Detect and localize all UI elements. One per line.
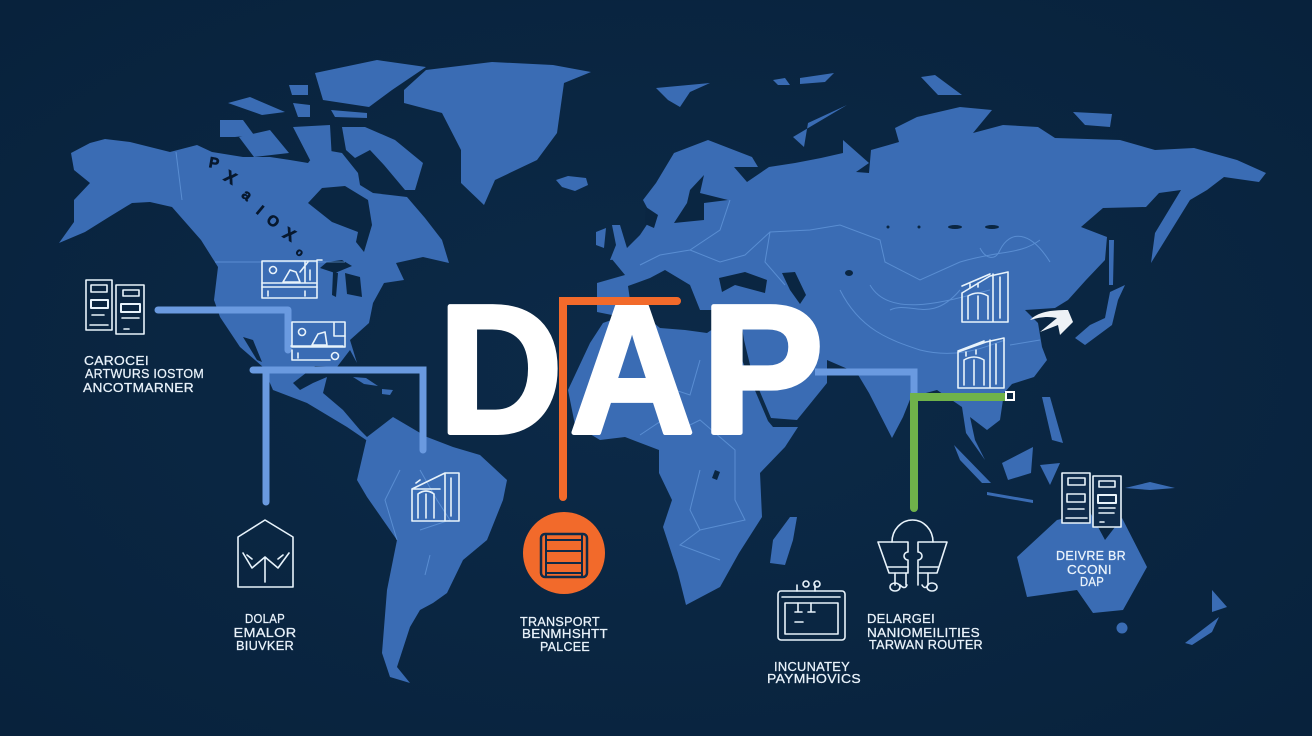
- text: Australia caption: DAP: [1080, 575, 1104, 589]
- marks: dark glyph trail across Canada: X: [280, 224, 299, 246]
- text: transport caption: BENMHSHTT: [522, 627, 608, 641]
- title: DAP: D: [438, 266, 562, 472]
- title: DAP: P: [702, 266, 824, 472]
- map: inland seas and lakes: [243, 175, 999, 480]
- text: west caption: ANCOTMARNER: [83, 381, 194, 395]
- text: west caption: CAROCEI: [84, 354, 149, 368]
- icon: orange circle with shutter: [523, 512, 605, 594]
- map: Japan: [1075, 240, 1125, 345]
- icon: bank, South America: [412, 473, 459, 521]
- text: house caption: DOLAP: [245, 612, 285, 626]
- map: British Isles: [596, 225, 630, 260]
- marks: dark glyph trail across Canada: O: [263, 211, 283, 232]
- map: Greenland: [404, 62, 591, 205]
- text: window caption: PAYMHOVICS: [767, 672, 861, 686]
- icon: document pair, Australia: [1062, 473, 1121, 527]
- route: orange line: [563, 301, 677, 497]
- text: house caption: [234, 612, 296, 653]
- text: Australia caption: [1056, 549, 1126, 589]
- route: blue frame over Central America: [253, 370, 423, 502]
- text: transport caption: [520, 615, 608, 654]
- icon: white bird: [1030, 310, 1073, 335]
- route: green line: [914, 397, 1006, 508]
- icon: house: [238, 520, 293, 587]
- map: North America: [59, 139, 449, 444]
- map: New Zealand: [1185, 590, 1227, 645]
- map: islands of south-east Asia: [954, 397, 1175, 503]
- route end marker: [1006, 392, 1014, 400]
- world map: [59, 60, 1266, 683]
- map: arctic Eurasian islands: [656, 73, 1112, 147]
- text: west caption: ARTWURS IOSTOM: [85, 367, 204, 381]
- icon: puzzle figure: [878, 520, 947, 591]
- text: transport caption: TRANSPORT: [520, 615, 600, 629]
- text: window caption: INCUNATEY: [774, 660, 850, 674]
- map: Madagascar: [770, 517, 797, 565]
- marks: dark glyph trail across Canada: a: [238, 186, 256, 205]
- route: blue line to Asia: [815, 372, 914, 398]
- map: Eurasia: [597, 107, 1266, 460]
- text: Australia caption: CCONI: [1067, 563, 1112, 577]
- text: house caption: BIUVKER: [236, 639, 294, 653]
- text: puzzle caption: DELARGEI: [867, 612, 935, 626]
- text: puzzle caption: NANIOMEILITIES: [867, 626, 980, 640]
- icon: document pair, west: [86, 280, 144, 334]
- title: DAP: [438, 266, 824, 472]
- text: house caption: EMALOR: [234, 626, 296, 640]
- map: Iceland: [556, 176, 588, 191]
- route: blue line to North America: [158, 310, 288, 350]
- marks: dark glyph trail across Canada: [208, 154, 306, 260]
- map: Australia: [1017, 512, 1147, 613]
- marks: dark glyph trail across Canada: I: [253, 203, 267, 218]
- icon: map card, upper: [262, 260, 322, 298]
- text: puzzle caption: TARWAN ROUTER: [869, 638, 983, 652]
- marks: dark glyph trail across Canada: P: [208, 154, 220, 173]
- map: Africa: [568, 312, 798, 605]
- icon: window panel: [778, 581, 845, 640]
- text: transport caption: PALCEE: [540, 640, 590, 654]
- map: Tasmania: [1116, 622, 1128, 634]
- icon: bank, lower Asia: [958, 338, 1004, 388]
- map: country borders: [176, 152, 1050, 575]
- map: Caribbean islands: [353, 377, 393, 395]
- marks: dark glyph trail across Canada: X: [221, 167, 240, 189]
- text: west caption: [83, 354, 204, 395]
- marks: dark glyph trail across Canada: o: [293, 246, 306, 260]
- text: Australia caption: DEIVRE BR: [1056, 549, 1126, 563]
- text: window caption: [767, 660, 861, 686]
- map: Arctic islands: [220, 60, 426, 190]
- icon: map card, lower: [291, 322, 345, 360]
- text: puzzle caption: [867, 612, 983, 652]
- map: South America: [357, 417, 507, 683]
- icon: bank, upper Asia: [962, 272, 1008, 322]
- title: DAP: A: [570, 266, 694, 472]
